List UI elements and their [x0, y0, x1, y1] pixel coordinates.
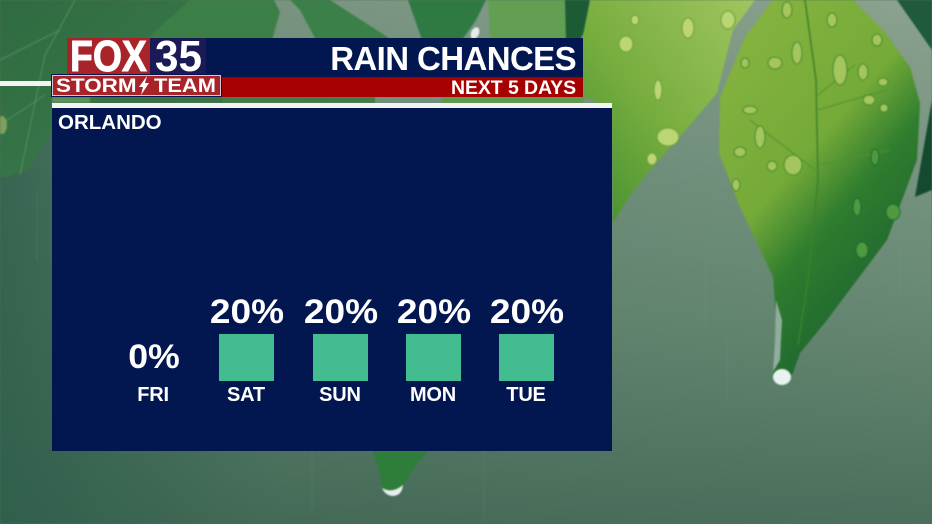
day label: MON	[410, 384, 456, 406]
column: TUE	[490, 293, 564, 406]
value: 20%	[397, 293, 471, 331]
column: SUN	[304, 293, 378, 406]
top-left leaf	[0, 0, 195, 178]
top centre leaves	[52, 0, 606, 103]
navy title bar	[83, 38, 583, 77]
column: MON	[397, 293, 471, 406]
bolt icon	[139, 76, 149, 95]
far right stem	[897, 0, 932, 197]
header white rule left	[0, 81, 52, 86]
logo dark box for 35	[150, 38, 206, 76]
logo red box	[67, 38, 150, 75]
column: SAT	[210, 293, 284, 406]
logo: storm team badge	[52, 75, 221, 96]
right large leaf with drop	[719, 0, 920, 385]
TEAM text: TEAM	[154, 76, 216, 97]
value: 20%	[210, 293, 284, 331]
day label: FRI	[137, 384, 169, 406]
red sub-title bar	[170, 77, 583, 97]
day label: SAT	[227, 384, 265, 406]
bar	[219, 334, 274, 381]
STORM text: STORM	[56, 76, 137, 97]
middle leaf over panel edge	[582, 0, 755, 223]
logo 35 text: 35	[155, 32, 202, 81]
bar	[499, 334, 554, 381]
logo FOX text: FOX	[70, 32, 147, 81]
logo: FOX 35	[67, 32, 206, 81]
title: rain chances: RAIN CHANCES	[330, 40, 576, 77]
day label: TUE	[506, 384, 546, 406]
column: FRI	[128, 338, 180, 406]
subtitle: next 5 days: NEXT 5 DAYS	[451, 77, 576, 99]
panel: rain chances chart	[52, 108, 612, 451]
value: 20%	[304, 293, 378, 331]
bar	[406, 334, 461, 381]
header	[0, 32, 583, 99]
small lower leaf with drop	[373, 451, 428, 496]
bar	[313, 334, 368, 381]
value: 20%	[490, 293, 564, 331]
faint rain streaks	[37, 190, 900, 520]
day label: SUN	[319, 384, 361, 406]
white rule above panel	[52, 103, 612, 108]
location label: ORLANDO	[58, 111, 162, 134]
value: 0%	[128, 338, 180, 376]
